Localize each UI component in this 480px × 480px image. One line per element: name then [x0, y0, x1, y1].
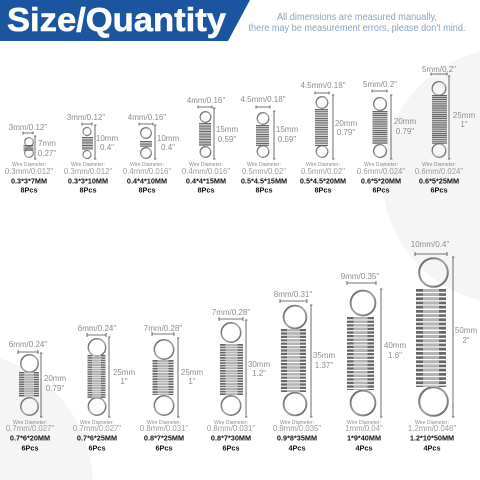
length dimension: 10mm: [96, 134, 118, 143]
spec text: 0.3*3*7MM: [11, 177, 47, 186]
spring drawing: [25, 138, 33, 157]
spec text: 0.7mm/0.027": [73, 424, 121, 433]
width dimension: [274, 290, 312, 303]
length dimension: [310, 305, 335, 417]
width dimension: 4.5mm/0.18": [300, 81, 346, 90]
spec text: 0.5*4.5*15MM: [241, 177, 287, 186]
width dimension: 4mm/0.16": [187, 96, 225, 105]
width dimension: 3mm/0.12": [67, 113, 105, 122]
width dimension: 8mm/0.31": [274, 290, 312, 299]
spring drawing: [21, 355, 38, 415]
spec text: 6Pcs: [222, 444, 240, 453]
spec text: Wire Diameter:: [280, 420, 314, 426]
spring drawing: [284, 306, 306, 415]
spec text: [6, 420, 54, 453]
spec text: Wire Diameter:: [415, 420, 449, 426]
width dimension: 7mm/0.28": [144, 324, 182, 333]
length dimension: 25mm: [113, 368, 135, 377]
width dimension: [341, 272, 379, 285]
spec text: [300, 162, 346, 195]
spec text: 0.7*6*20MM: [10, 434, 50, 443]
spec text: 0.5mm/0.02": [242, 167, 286, 176]
length dimension: [177, 338, 203, 417]
spec text: 0.9mm/0.035": [273, 424, 321, 433]
spec text: 0.4*4*15MM: [186, 177, 226, 186]
spec text: 0.4mm/0.016": [123, 167, 171, 176]
spec text: [241, 162, 287, 195]
spec text: 0.3mm/0.012": [5, 167, 53, 176]
spec text: [408, 420, 456, 453]
width dimension: 5mm/0.2": [422, 65, 456, 74]
spec text: 8Pcs: [138, 186, 156, 195]
length dimension: 25mm: [453, 111, 475, 120]
length dimension: [448, 76, 475, 159]
spec text: Wire Diameter:: [422, 162, 456, 168]
spec text: Wire Diameter:: [147, 420, 181, 426]
width dimension: 4.5mm/0.18": [240, 95, 286, 104]
length dimension: 0.59": [218, 135, 236, 144]
spring drawing: [351, 291, 375, 415]
width dimension: [411, 240, 449, 256]
length dimension: 20mm: [44, 374, 66, 383]
spec text: 6Pcs: [372, 186, 390, 195]
spec text: 0.8mm/0.031": [207, 424, 255, 433]
spec text: 8Pcs: [314, 186, 332, 195]
length dimension: [390, 95, 416, 159]
spec text: [357, 162, 405, 195]
length dimension: 0.27": [38, 149, 56, 158]
length dimension: 0.59": [278, 135, 296, 144]
spring drawing: [221, 323, 241, 415]
length dimension: 10mm: [157, 134, 179, 143]
spec text: Wire Diameter:: [12, 162, 46, 168]
spring item 0.8*7*25MM: [140, 324, 203, 453]
spec text: Wire Diameter:: [80, 420, 114, 426]
spec text: 8Pcs: [79, 186, 97, 195]
width dimension: 6mm/0.24": [9, 340, 47, 349]
length dimension: 15mm: [276, 125, 298, 134]
length dimension: 25mm: [181, 368, 203, 377]
width dimension: 3mm/0.12": [9, 123, 47, 132]
length dimension: [332, 95, 357, 159]
width dimension: 5mm/0.2": [363, 80, 397, 89]
spec text: [207, 420, 255, 453]
spring item 0.9*8*35MM: [273, 290, 335, 453]
length dimension: 35mm: [313, 351, 335, 360]
length dimension: [452, 257, 477, 417]
spring item 1*9*40MM: [341, 272, 406, 453]
spec text: Wire Diameter:: [347, 420, 381, 426]
spring drawing: [83, 128, 91, 158]
spec text: Wire Diameter:: [189, 162, 223, 168]
spec text: Wire Diameter:: [247, 162, 281, 168]
length dimension: 7mm: [38, 139, 56, 148]
spec text: 1.2mm/0.046": [408, 424, 456, 433]
width dimension: 10mm/0.4": [411, 240, 449, 249]
spec text: [415, 162, 463, 195]
spec text: 0.8*7*25MM: [144, 434, 184, 443]
spec text: Wire Diameter:: [214, 420, 248, 426]
spec text: 8Pcs: [255, 186, 273, 195]
spring item 0.8*7*30MM: [207, 308, 270, 453]
spec text: [273, 420, 321, 453]
spec text: 1mm/0.04": [345, 424, 383, 433]
length dimension: 1.37": [315, 361, 333, 370]
spring item 0.4*4*15MM: [182, 96, 238, 195]
spring drawing: [257, 113, 269, 157]
spec text: Wire Diameter:: [364, 162, 398, 168]
spec text: [123, 162, 171, 195]
spec text: 0.7mm/0.027": [6, 424, 54, 433]
length dimension: 0.79": [337, 128, 355, 137]
width dimension: 9mm/0.35": [341, 272, 379, 281]
length dimension: [154, 125, 179, 159]
spec text: 4Pcs: [355, 444, 373, 453]
spring drawing: [141, 128, 151, 158]
spec text: 6Pcs: [88, 444, 106, 453]
length dimension: [213, 108, 238, 159]
length dimension: [273, 111, 298, 159]
spring item 0.7*6*20MM: [6, 340, 66, 453]
spec text: 1.2*10*50MM: [410, 434, 454, 443]
spec text: 4Pcs: [288, 444, 306, 453]
length dimension: [40, 353, 66, 417]
width dimension: 6mm/0.24": [78, 324, 116, 333]
length dimension: 1.2": [252, 369, 266, 378]
spec text: 0.6mm/0.024": [415, 167, 463, 176]
spec text: 0.4mm/0.016": [182, 167, 230, 176]
length dimension: 1": [188, 377, 196, 386]
width dimension: [212, 308, 250, 321]
title: Size/Quantity: [7, 1, 227, 38]
spring item 1.2*10*50MM: [408, 240, 477, 453]
spring drawing: [316, 97, 328, 157]
spec text: 1*9*40MM: [347, 434, 381, 443]
length dimension: [380, 289, 406, 417]
length dimension: 1": [120, 377, 128, 386]
spec text: [64, 162, 112, 195]
length dimension: 20mm: [394, 117, 416, 126]
length dimension: [245, 320, 270, 417]
spec text: 6Pcs: [430, 186, 448, 195]
spring drawing: [419, 258, 448, 416]
measurement note: [248, 12, 466, 34]
spec text: 8Pcs: [197, 186, 215, 195]
length dimension: 0.79": [396, 127, 414, 136]
spring drawing: [154, 340, 174, 415]
spec text: [5, 162, 53, 195]
spec text: 4Pcs: [423, 444, 441, 453]
length dimension: 20mm: [335, 119, 357, 128]
width dimension: 4mm/0.16": [128, 113, 166, 122]
spec text: 0.7*6*25MM: [77, 434, 117, 443]
spring drawing: [432, 82, 446, 157]
spring item 0.5*4.5*20MM: [300, 81, 357, 195]
spring item 0.7*6*25MM: [73, 324, 135, 453]
spring item 0.4*4*10MM: [123, 113, 179, 195]
width dimension: 7mm/0.28": [212, 308, 250, 317]
length dimension: 0.79": [46, 384, 64, 393]
spec text: 0.6mm/0.024": [357, 167, 405, 176]
spec text: [73, 420, 121, 453]
spring drawing: [88, 339, 106, 415]
spec text: 0.9*8*35MM: [277, 434, 317, 443]
spring item 0.5*4.5*15MM: [240, 95, 298, 195]
length dimension: 15mm: [216, 125, 238, 134]
length dimension: [34, 136, 56, 159]
length dimension: 40mm: [384, 341, 406, 350]
spec text: 0.3mm/0.012": [64, 167, 112, 176]
spec text: [182, 162, 230, 195]
spring drawing: [200, 112, 211, 157]
spec text: 0.6*5*25MM: [419, 177, 459, 186]
spec text: Wire Diameter:: [13, 420, 47, 426]
spring item 0.6*5*25MM: [415, 65, 475, 195]
spec text: 8Pcs: [20, 186, 38, 195]
spring item 0.3*3*7MM: [5, 123, 56, 195]
spec text: 0.8*7*30MM: [211, 434, 251, 443]
length dimension: 30mm: [248, 360, 270, 369]
spec text: 0.4*4*10MM: [127, 177, 167, 186]
spring item 0.6*5*20MM: [357, 80, 416, 195]
spec text: 0.6*5*20MM: [361, 177, 401, 186]
length dimension: [108, 337, 135, 417]
spec text: Wire Diameter:: [71, 162, 105, 168]
spring drawing: [374, 98, 386, 157]
length dimension: 0.4": [100, 143, 114, 152]
length dimension: 2": [462, 336, 470, 345]
spec text: Wire Diameter:: [306, 162, 340, 168]
spec text: 0.5mm/0.02": [301, 167, 345, 176]
length dimension: 50mm: [455, 326, 477, 335]
length dimension: 1.6": [388, 351, 402, 360]
spec text: 0.8mm/0.031": [140, 424, 188, 433]
length dimension: 1": [460, 120, 468, 129]
measurement note: All dimensions are measured manually,: [277, 12, 437, 23]
spec text: 0.5*4.5*20MM: [300, 177, 346, 186]
spec text: Wire Diameter:: [130, 162, 164, 168]
spec text: 6Pcs: [21, 444, 39, 453]
header banner: [0, 0, 250, 41]
length dimension: 0.4": [161, 143, 175, 152]
spec text: 0.3*3*10MM: [68, 177, 108, 186]
spring item 0.3*3*10MM: [64, 113, 118, 195]
length dimension: [94, 125, 118, 159]
spec text: [345, 420, 383, 453]
spec text: [140, 420, 188, 453]
spec text: 6Pcs: [155, 444, 173, 453]
